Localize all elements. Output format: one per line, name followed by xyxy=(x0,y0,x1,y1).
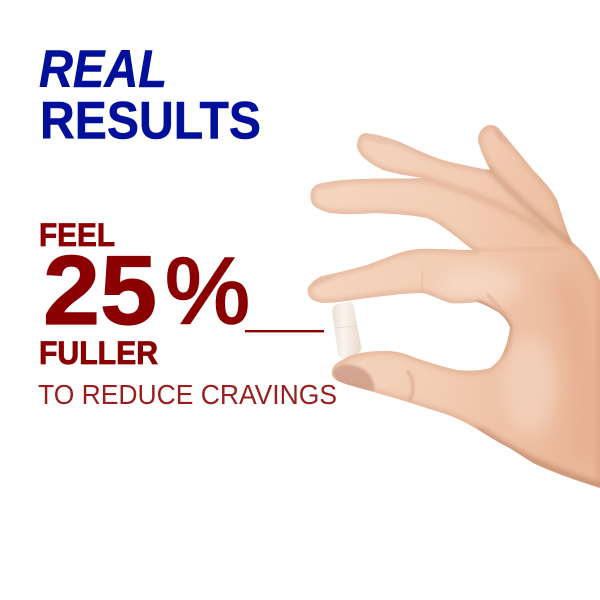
callout: feel 25% fuller: % xyxy=(165,238,250,343)
callout: feel 25% fuller: FULLER xyxy=(39,335,158,371)
title: real results: RESULTS xyxy=(40,92,261,150)
shading: finger creases xyxy=(408,170,600,486)
infographic canvas xyxy=(38,50,600,488)
leader line xyxy=(245,330,324,332)
fingernails xyxy=(309,126,508,391)
callout: feel 25% fuller: FEEL xyxy=(39,217,115,253)
callout: feel 25% fuller: 25 xyxy=(43,235,157,345)
title: real results xyxy=(39,40,261,150)
icon: capsule xyxy=(332,302,362,359)
shading: back of hand xyxy=(444,264,592,450)
hand holding capsule xyxy=(308,125,600,488)
title: real results: REAL xyxy=(39,40,167,99)
shading: silhouette rim xyxy=(308,125,600,488)
subheading: to reduce cravings: TO REDUCE CRAVINGS xyxy=(38,379,337,410)
callout: feel 25% fuller xyxy=(39,217,250,371)
